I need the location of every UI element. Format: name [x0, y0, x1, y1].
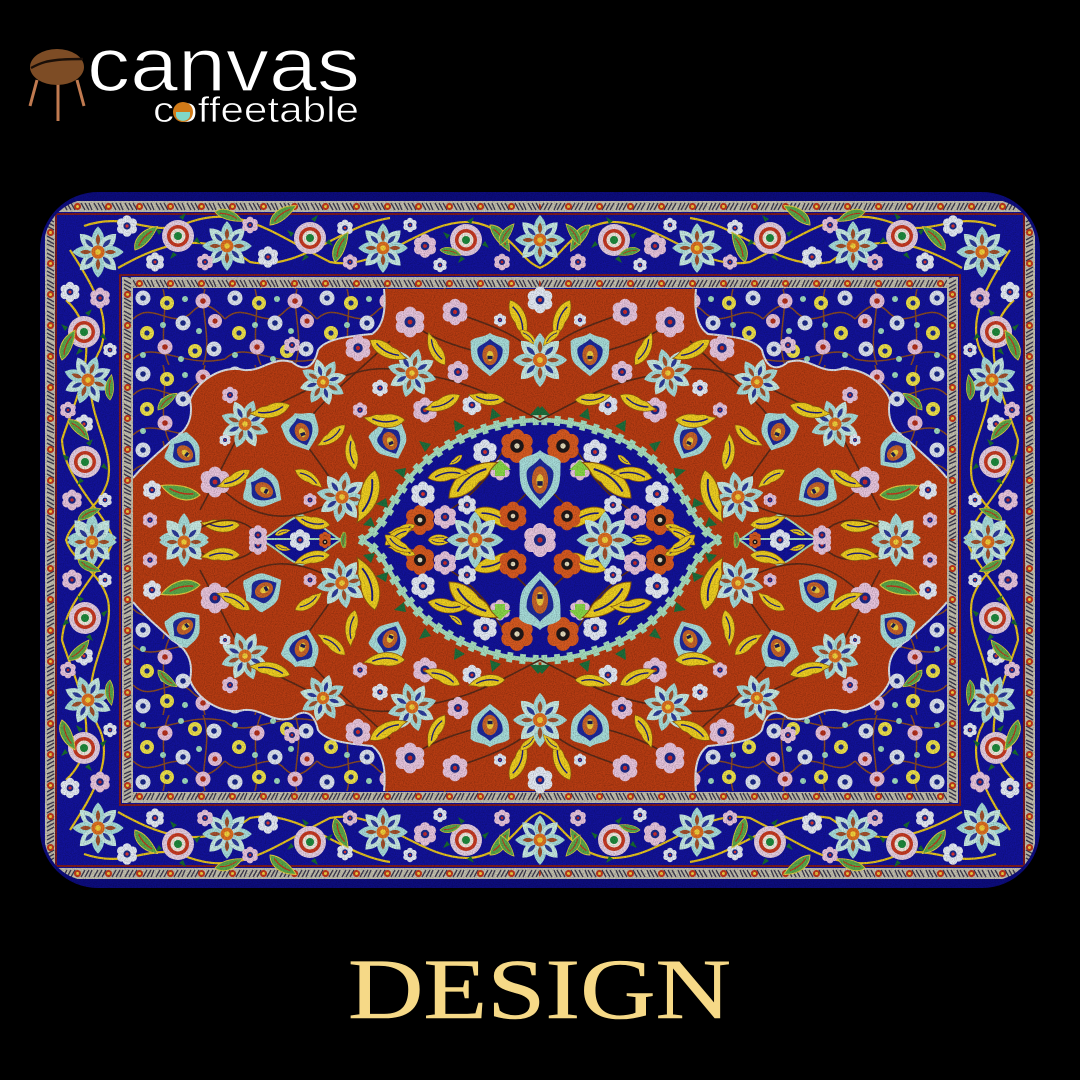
- icon: coffee cup: [173, 102, 193, 122]
- carpet blue rim: [40, 192, 1040, 888]
- carpet floral ornaments: [54, 201, 1026, 879]
- carpet base quadrants: [44, 201, 1036, 879]
- logo wordmark: canvas: [87, 23, 360, 108]
- icon: coffee bean table: [30, 49, 84, 121]
- logo sub wordmark: coffeetable: [153, 89, 359, 130]
- logo: [30, 23, 360, 130]
- woven texture overlay: [40, 192, 1040, 888]
- title: DESIGN: [348, 941, 731, 1037]
- carpet: [40, 192, 1040, 888]
- carpet body: [44, 201, 1036, 879]
